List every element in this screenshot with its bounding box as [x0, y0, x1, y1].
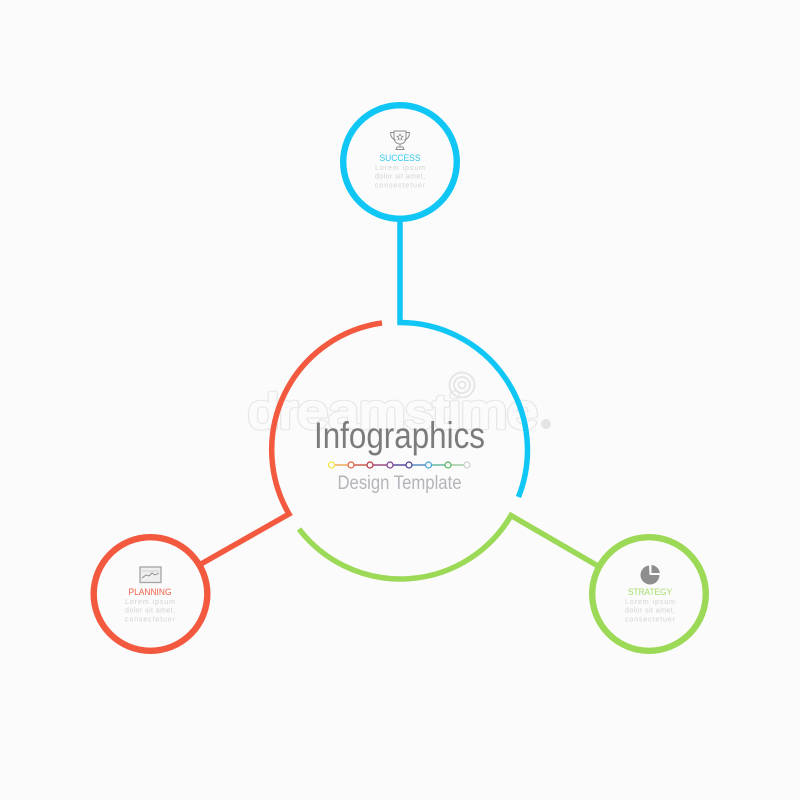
heading: planning: PLANNING [128, 587, 172, 597]
icon: chart [140, 567, 161, 582]
text block: success: dolor sit amet, [375, 174, 425, 180]
watermark: dreamstime [248, 386, 538, 439]
text block: strategy: Lorem ipsum [625, 599, 675, 606]
panel: success [343, 105, 457, 219]
text block: planning: Lorem ipsum [125, 599, 175, 606]
text block: success: Lorem ipsum [375, 165, 425, 172]
blue connector and arc [400, 220, 527, 497]
watermark [248, 372, 551, 439]
text block: strategy: dolor sit amet, [625, 608, 675, 614]
text block: planning [125, 599, 176, 624]
red connector and arc [201, 323, 382, 564]
timeline of dots [328, 462, 470, 468]
text block: strategy: consectetuer [625, 616, 676, 624]
text block: success: consectetuer [375, 182, 426, 190]
subtitle: Design Template [338, 473, 462, 494]
text block: planning: consectetuer [125, 616, 176, 624]
panel: strategy [592, 537, 706, 651]
panel: planning [94, 537, 207, 651]
heading: success: SUCCESS [380, 153, 420, 163]
green connector and arc [299, 516, 598, 579]
text block: success [375, 165, 426, 190]
icon: trophy [390, 131, 410, 150]
title: Infographics [314, 415, 485, 456]
text block: strategy [625, 599, 676, 624]
text block: planning: dolor sit amet, [125, 608, 175, 614]
watermark: dreamstime [248, 386, 538, 439]
icon: pie chart [641, 565, 660, 584]
heading: strategy: STRATEGY [628, 587, 672, 597]
